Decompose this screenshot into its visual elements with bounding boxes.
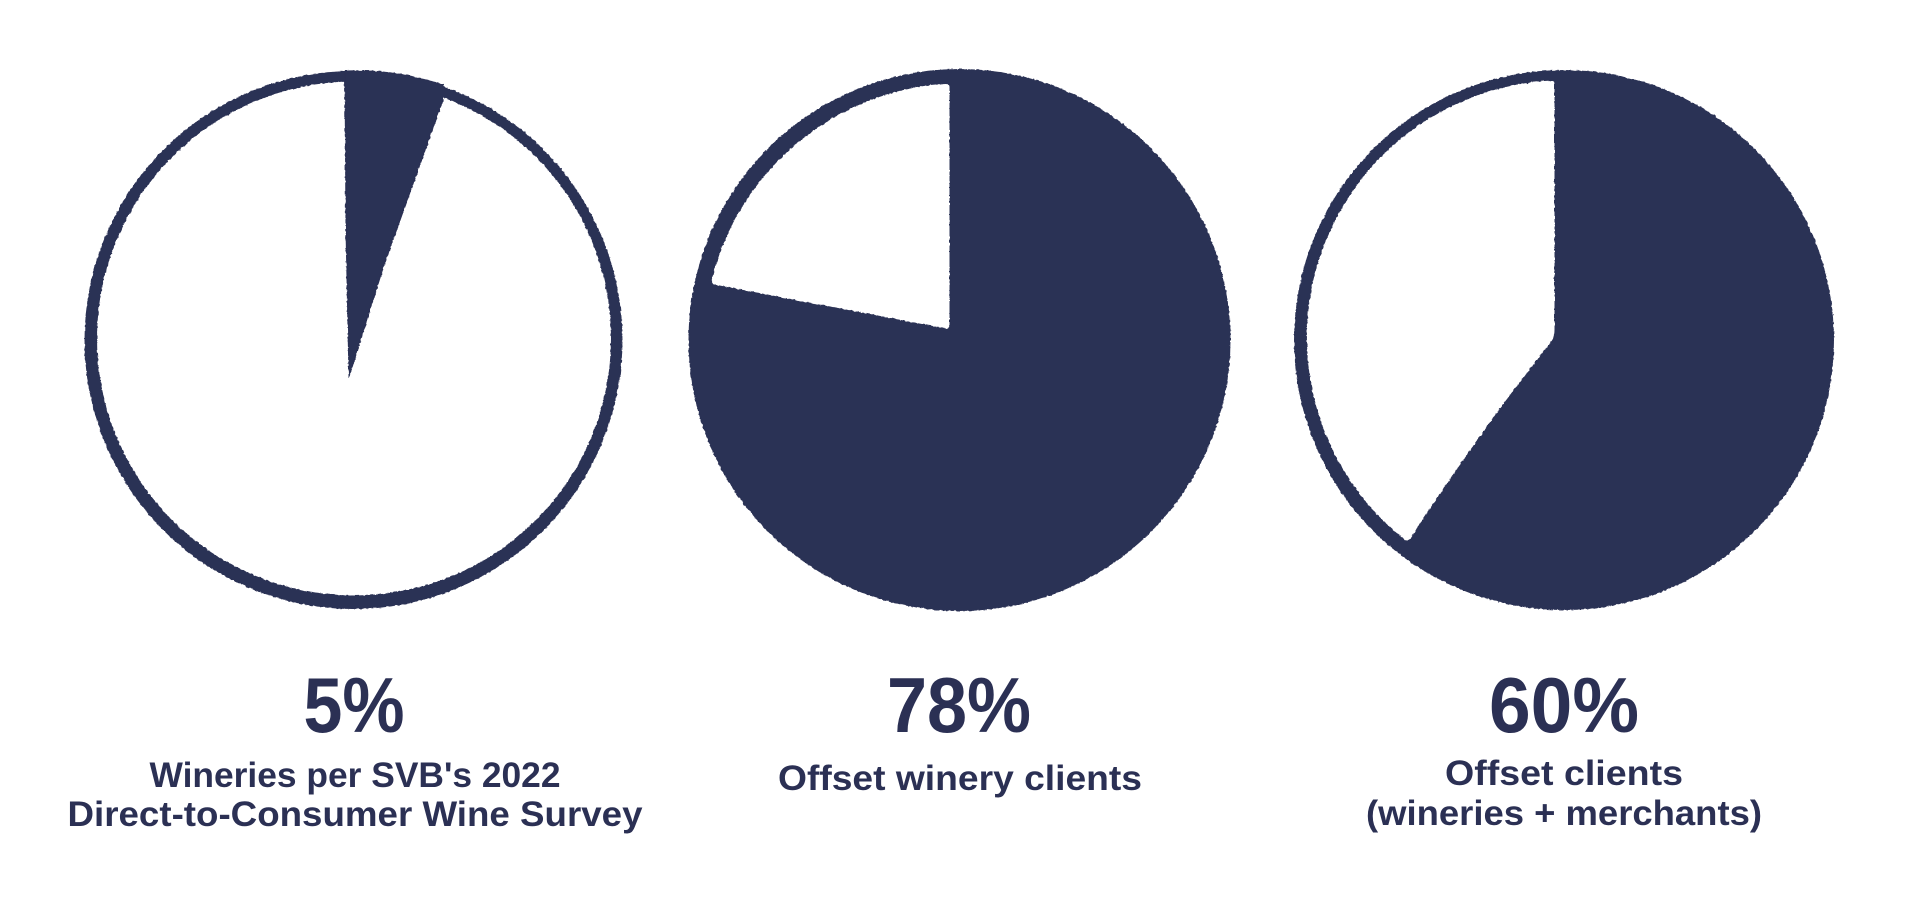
panel: 5% wineries: Direct-to-Consumer Wine Survey — [68, 795, 643, 834]
pie chart: 60% — [1294, 70, 1834, 610]
label: wineries per SVB survey: Wineries per SVB's 2022 — [150, 756, 560, 795]
stat: 60%: 60% — [1489, 661, 1639, 749]
label: Offset clients wineries + merchants: Offset clients — [1445, 754, 1683, 793]
label: Offset winery clients: Offset winery clients — [778, 759, 1142, 798]
stat: 5%: 5% — [304, 661, 404, 749]
pie chart: 5% — [84, 71, 622, 609]
pie chart: 78% — [688, 69, 1230, 611]
panel: 60% Offset clients: (wineries + merchants) — [1366, 794, 1762, 833]
stat: 78%: 78% — [887, 661, 1031, 749]
panel: 60% Offset clients — [1294, 70, 1834, 833]
panel: 5% wineries — [68, 71, 643, 834]
panel: 78% Offset winery clients — [688, 69, 1230, 798]
